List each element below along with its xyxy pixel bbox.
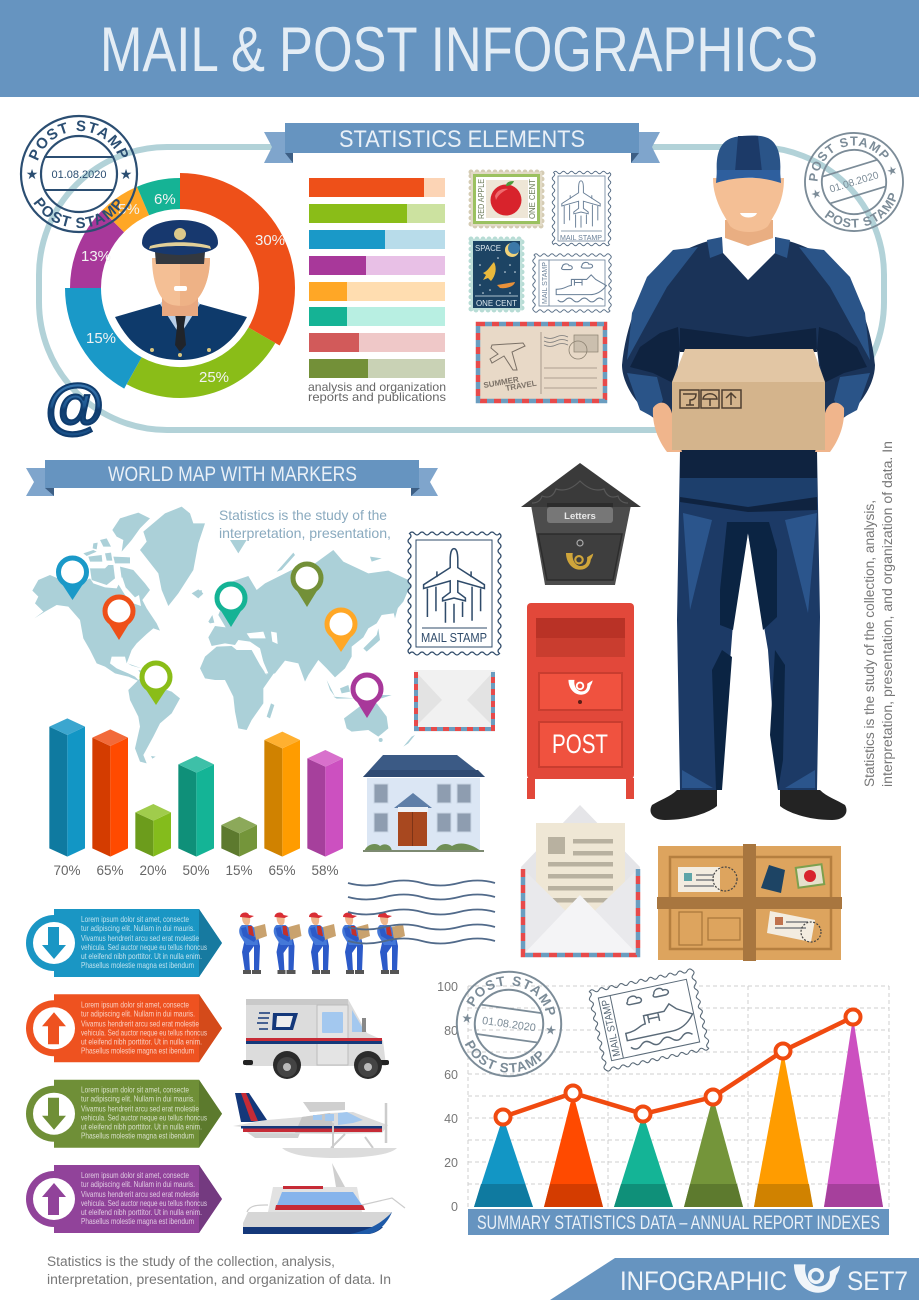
info arrow: green <box>26 1080 222 1148</box>
arrow body text: Lorem ipsum dolor sit amet, consecte <box>81 1086 189 1095</box>
postmark wavy lines <box>348 880 495 944</box>
mailbox letters <box>521 463 641 585</box>
donut percentage labels: 13% <box>81 248 111 265</box>
map intro text <box>219 507 391 541</box>
ribbon heading: STATISTICS ELEMENTS <box>339 126 585 153</box>
arrow body text: ut eleifend nibh porttitor. Ut in nulla enim. <box>81 1123 202 1132</box>
post stamp top left: POST STAMP <box>34 197 120 228</box>
donut chart <box>65 173 295 398</box>
arrow body text: vehicula. Sed auctor neque eu tellus rhoncus <box>81 1199 207 1208</box>
arrow body text <box>81 1171 207 1226</box>
horizontal progress bars <box>308 178 446 404</box>
arrow body text: ut eleifend nibh porttitor. Ut in nulla enim. <box>81 1208 202 1217</box>
courier torso and arms <box>622 237 875 420</box>
map pins <box>58 558 381 718</box>
bar 58% <box>307 750 343 857</box>
donut percentage labels: 30% <box>255 232 285 249</box>
3D bar chart <box>49 718 343 878</box>
courier legs <box>677 450 820 790</box>
footer band <box>550 1258 919 1300</box>
y-axis labels: 20 <box>444 1156 458 1170</box>
arrow body text <box>81 915 207 970</box>
info arrow: purple <box>26 1165 222 1233</box>
post stamp top right: 01.08.2020 <box>828 170 880 196</box>
hudson bay <box>116 577 141 606</box>
postcard <box>478 324 605 401</box>
post stamp chart: POST STAMP <box>466 976 556 1015</box>
map intro text: interpretation, presentation, <box>219 525 391 541</box>
footer label right: SET7 <box>847 1266 908 1296</box>
post stamp chart <box>456 970 562 1078</box>
yacht <box>243 1163 405 1234</box>
courier shoes <box>651 790 846 820</box>
stamp: red apple: RED APPLE <box>477 179 486 219</box>
arrow body text: ut eleifend nibh porttitor. Ut in nulla enim. <box>81 952 202 961</box>
arrow body text: ut eleifend nibh porttitor. Ut in nulla enim. <box>81 1037 202 1046</box>
pin: olive <box>293 564 321 607</box>
postcard: SUMMER <box>483 375 520 390</box>
pin: orange <box>105 597 133 640</box>
arrow body text: Lorem ipsum dolor sit amet, consecte <box>81 915 189 924</box>
y-axis labels: 0 <box>451 1200 458 1214</box>
arrow body text: Phasellus molestie magna est ibendum <box>81 1046 194 1055</box>
post stamp top right: POST STAMP <box>808 136 889 182</box>
red post box: POST <box>552 729 608 759</box>
donut percentage labels: 15% <box>86 330 116 347</box>
arrow body text: Vivamus hendrerit arcu sed erat molestie <box>81 934 199 943</box>
bar labels: 50% <box>182 863 210 878</box>
y-axis labels <box>437 980 458 1214</box>
seaplane <box>233 1093 397 1158</box>
post stamp top right: POST STAMP <box>824 192 896 228</box>
bar labels: 70% <box>53 863 81 878</box>
arrow body text <box>81 1000 207 1055</box>
vertical side text: interpretation, presentation, and organization of data. In <box>880 441 895 787</box>
post stamp top right: ★ <box>809 186 823 202</box>
arrow body text: Vivamus hendrerit arcu sed erat molestie <box>81 1105 199 1114</box>
bar 50% <box>178 756 214 857</box>
at sign icon: @ <box>45 372 104 440</box>
bar 15% <box>221 817 257 857</box>
stamp: space: ONE CENT <box>476 299 517 308</box>
ribbon: statistics elements <box>264 123 660 163</box>
ribbon heading: WORLD MAP WITH MARKERS <box>108 463 357 486</box>
bottom left description <box>47 1254 391 1287</box>
bar labels: 20% <box>139 863 167 878</box>
bars caption: analysis and organization <box>308 380 446 394</box>
info arrow: blue <box>26 909 222 977</box>
summary triangle chart <box>437 980 889 1235</box>
arrow body text <box>81 1086 207 1141</box>
post stamp chart: ★ <box>544 1023 557 1038</box>
map intro text: Statistics is the study of the <box>219 507 387 523</box>
arrow body text: Phasellus molestie magna est ibendum <box>81 961 194 970</box>
pin: purple <box>353 675 381 718</box>
cardboard box <box>672 349 825 450</box>
pin: blue <box>58 558 86 600</box>
bottom left description: Statistics is the study of the collection, analysis, <box>47 1254 335 1269</box>
footer label left: INFOGRAPHIC <box>620 1266 787 1296</box>
stamp: mail stamp plane: MAIL STAMP <box>560 233 602 242</box>
stamp: red apple <box>471 172 542 226</box>
post stamp chart: ★ <box>460 1011 474 1026</box>
courier 1 <box>239 913 267 974</box>
mail van <box>243 999 389 1079</box>
bar 65% yellow <box>264 732 300 857</box>
inland seas <box>247 632 278 673</box>
bottom left description: interpretation, presentation, and organization of data. In <box>47 1272 391 1287</box>
stamp: space <box>471 239 522 310</box>
arrow body text: Lorem ipsum dolor sit amet, consecte <box>81 1000 189 1009</box>
arrow body text: tur adipiscing elit. Nullam in dui mauris. <box>81 1009 195 1018</box>
ship stamp chart: MAIL STAMP <box>599 998 623 1058</box>
arrow body text: Vivamus hendrerit arcu sed erat molestie <box>81 1190 199 1199</box>
trend line <box>496 1010 860 1124</box>
arrow body text: Lorem ipsum dolor sit amet, consecte <box>81 1171 189 1180</box>
arrow body text: tur adipiscing elit. Nullam in dui mauris. <box>81 1095 195 1104</box>
courier head and cap <box>713 136 784 246</box>
post stamp chart: POST STAMP <box>464 1040 542 1072</box>
couriers row <box>239 913 405 974</box>
americas and greenland <box>32 507 205 763</box>
small airmail envelope <box>414 670 495 732</box>
post stamp top left: POST STAMP <box>28 120 128 160</box>
post office building <box>363 755 485 852</box>
arrow body text: Phasellus molestie magna est ibendum <box>81 1132 194 1141</box>
ship stamp chart <box>588 968 710 1072</box>
courier 4 <box>342 913 370 974</box>
post stamp top left <box>20 114 138 234</box>
stamp: mail stamp plane <box>552 171 611 246</box>
post stamp top left: ★ <box>26 166 38 182</box>
post stamp top right: ★ <box>885 162 899 179</box>
mailbox letters: Letters <box>564 511 596 522</box>
y-axis labels: 60 <box>444 1068 458 1082</box>
stamp: space: SPACE <box>475 244 501 253</box>
bar labels: 65% <box>268 863 296 878</box>
bar 20% <box>135 804 171 857</box>
y-axis labels: 100 <box>437 980 458 994</box>
ribbon: world map <box>26 460 438 496</box>
post stamp top left: ★ <box>120 166 132 182</box>
rounded frame of statistics panel <box>39 147 884 430</box>
info arrow: orange <box>26 994 222 1062</box>
y-axis labels: 40 <box>444 1112 458 1126</box>
stamp: ship <box>533 254 611 312</box>
stamp: red apple: ONE CENT <box>528 179 537 219</box>
donut percentage labels <box>81 191 285 386</box>
bar labels <box>53 863 339 878</box>
arrow body text: vehicula. Sed auctor neque eu tellus rhoncus <box>81 1028 207 1037</box>
arrow body text: tur adipiscing elit. Nullam in dui mauris. <box>81 924 195 933</box>
large mail stamp: MAIL STAMP <box>421 630 487 645</box>
bars caption: reports and publications <box>308 390 446 404</box>
stamp: ship: MAIL STAMP <box>540 262 549 304</box>
open envelope with letter <box>521 805 640 957</box>
donut percentage labels: 25% <box>199 369 229 386</box>
bar 70% <box>49 718 85 857</box>
bar labels: 15% <box>225 863 253 878</box>
vertical side text <box>862 441 895 787</box>
eurasia africa australia <box>195 540 425 747</box>
courier 2 <box>274 913 302 974</box>
world map <box>32 507 425 763</box>
courier 5 <box>377 913 405 974</box>
arrow body text: vehicula. Sed auctor neque eu tellus rhoncus <box>81 943 207 952</box>
large mail stamp <box>408 532 501 655</box>
courier figure <box>622 136 875 820</box>
triangle bars <box>474 1017 883 1207</box>
bars caption <box>308 380 446 404</box>
hands <box>653 403 844 452</box>
chart grid <box>468 986 889 1207</box>
arrow body text: Vivamus hendrerit arcu sed erat molestie <box>81 1019 199 1028</box>
pin: yellow <box>327 610 355 652</box>
bar labels: 65% <box>96 863 124 878</box>
bar 65% orange <box>92 729 128 857</box>
arrow body text: Phasellus molestie magna est ibendum <box>81 1217 194 1226</box>
captain portrait <box>115 220 247 360</box>
donut percentage labels: 6% <box>154 191 176 208</box>
y-axis labels: 80 <box>444 1024 458 1038</box>
vertical side text: Statistics is the study of the collection, analysis, <box>862 500 877 787</box>
post stamp chart: 01.08.2020 <box>481 1015 537 1034</box>
courier 3 <box>308 913 336 974</box>
icon: post horn <box>794 1264 840 1293</box>
arrow body text: tur adipiscing elit. Nullam in dui mauris. <box>81 1180 195 1189</box>
postcard: TRAVEL <box>505 379 537 393</box>
red post box <box>527 603 634 799</box>
post stamp top right <box>804 132 904 232</box>
pin: green <box>142 663 170 705</box>
pin: teal <box>217 584 245 627</box>
donut percentage labels: 5% <box>118 201 140 218</box>
bar labels: 58% <box>311 863 339 878</box>
arrow body text: vehicula. Sed auctor neque eu tellus rhoncus <box>81 1114 207 1123</box>
parcel crate <box>657 844 842 961</box>
post stamp top left: 01.08.2020 <box>51 169 107 181</box>
header band <box>0 0 919 97</box>
